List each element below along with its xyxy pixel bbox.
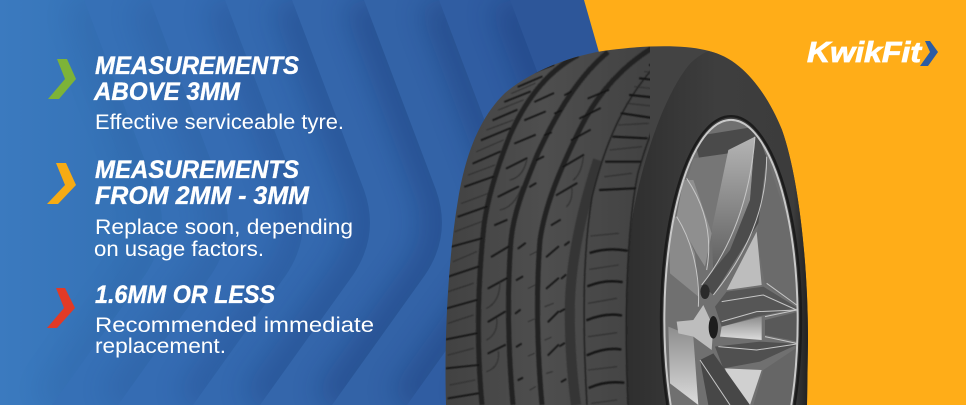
tread pattern xyxy=(446,46,650,405)
tread blocks lower xyxy=(447,220,627,403)
text: replace soon: on usage factors. xyxy=(94,237,264,261)
logo: Kwik Fit: KwikFit xyxy=(807,37,922,69)
text: recommended immediate replacement xyxy=(95,313,374,358)
circumferential grooves xyxy=(476,46,650,405)
tyre sidewall xyxy=(626,51,808,405)
spokes and barrel xyxy=(668,127,798,405)
alloy wheel xyxy=(661,116,801,405)
rim lip xyxy=(664,120,798,405)
chevron: red xyxy=(47,288,75,328)
heading: measurements from 2mm - 3mm: MEASUREMENTS xyxy=(95,156,299,184)
heading: measurements above 3mm: ABOVE 3MM xyxy=(93,78,241,106)
text: recommended immediate replacement: Recommended immediate xyxy=(95,313,374,337)
tyre and wheel xyxy=(446,46,808,405)
rim face xyxy=(664,120,798,405)
heading: measurements above 3mm: MEASUREMENTS xyxy=(95,52,299,80)
text: replace soon: Replace soon, depending xyxy=(95,215,353,239)
tyre tread body xyxy=(446,46,808,405)
tread blocks upper xyxy=(458,65,677,217)
chevron: green xyxy=(48,59,76,99)
chevron: amber xyxy=(47,163,76,204)
text: recommended immediate replacement: replacement. xyxy=(95,334,226,358)
text: effective serviceable tyre: Effective serviceable tyre. xyxy=(95,110,344,134)
heading: measurements above 3mm xyxy=(93,52,299,106)
heading: measurements from 2mm - 3mm xyxy=(95,156,310,210)
rim outer edge xyxy=(661,116,801,405)
heading: 1.6mm or less: 1.6MM OR LESS xyxy=(95,281,275,309)
background: yellow panel xyxy=(584,0,966,405)
text: replace soon xyxy=(94,215,353,261)
heading: measurements from 2mm - 3mm: FROM 2MM - 3MM xyxy=(95,182,310,210)
logo chevron xyxy=(920,41,938,66)
